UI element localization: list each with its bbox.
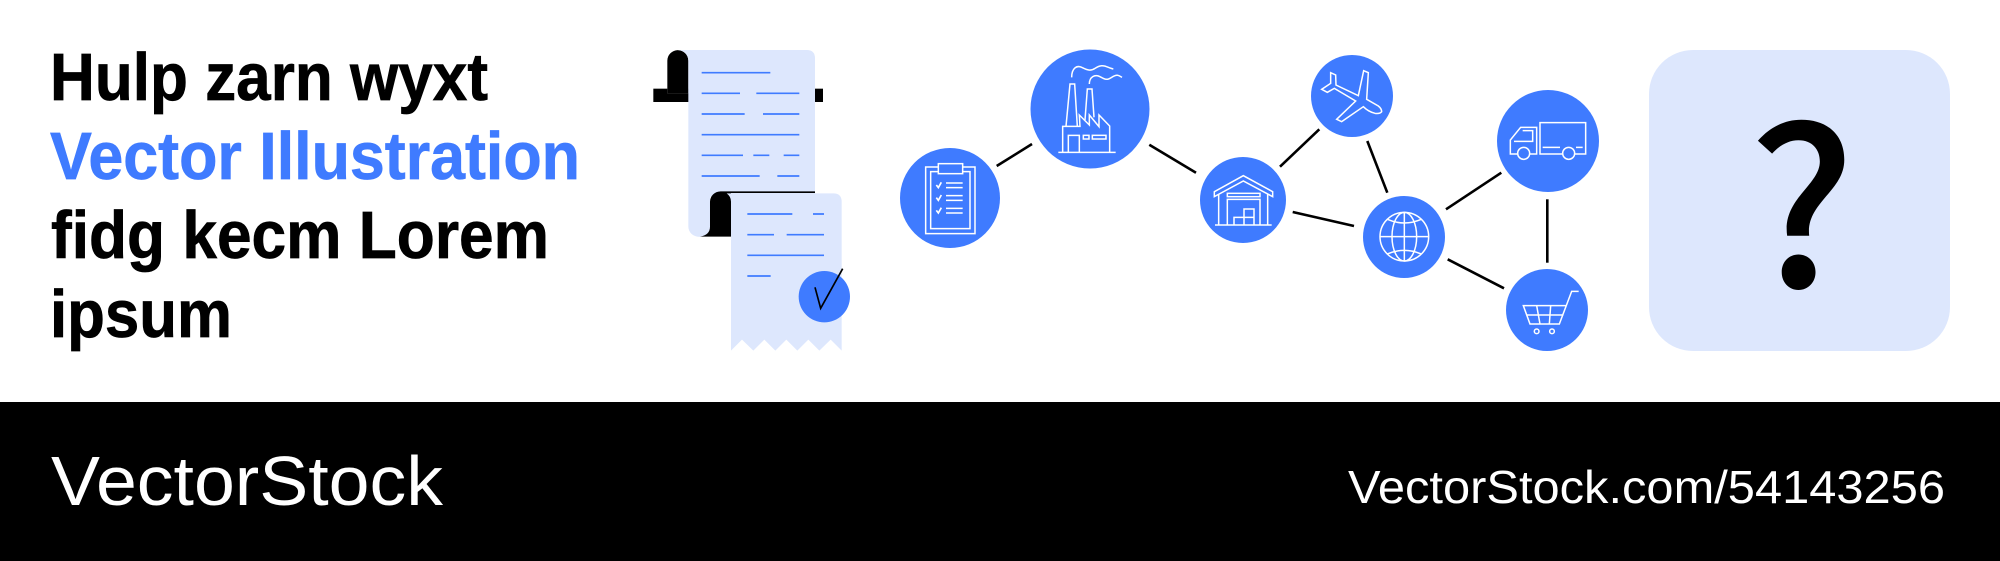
- icon: clipboard: [900, 148, 1000, 248]
- footer logo: VectorStock: [51, 442, 444, 520]
- title: Vector Illustration: [50, 119, 580, 194]
- title: fidg kecm Lorem: [51, 198, 549, 273]
- title: Hulp zarn wyxt: [50, 40, 488, 115]
- footer bar: [0, 402, 2000, 561]
- title: [50, 40, 580, 352]
- illustration: receipt scroll: [653, 50, 850, 351]
- question mark: ?: [1748, 34, 1856, 350]
- icon: airplane: [1311, 55, 1393, 137]
- connector lines: [997, 129, 1547, 288]
- icon: factory: [1030, 50, 1150, 168]
- icon: shopping cart: [1506, 269, 1588, 351]
- panel: question mark card: [1649, 34, 1950, 351]
- title: ipsum: [50, 277, 232, 352]
- icon: warehouse: [1200, 157, 1286, 243]
- icon: globe: [1363, 196, 1445, 278]
- footer url: VectorStock.com/54143256: [1348, 461, 1945, 513]
- icon: delivery truck: [1497, 90, 1599, 192]
